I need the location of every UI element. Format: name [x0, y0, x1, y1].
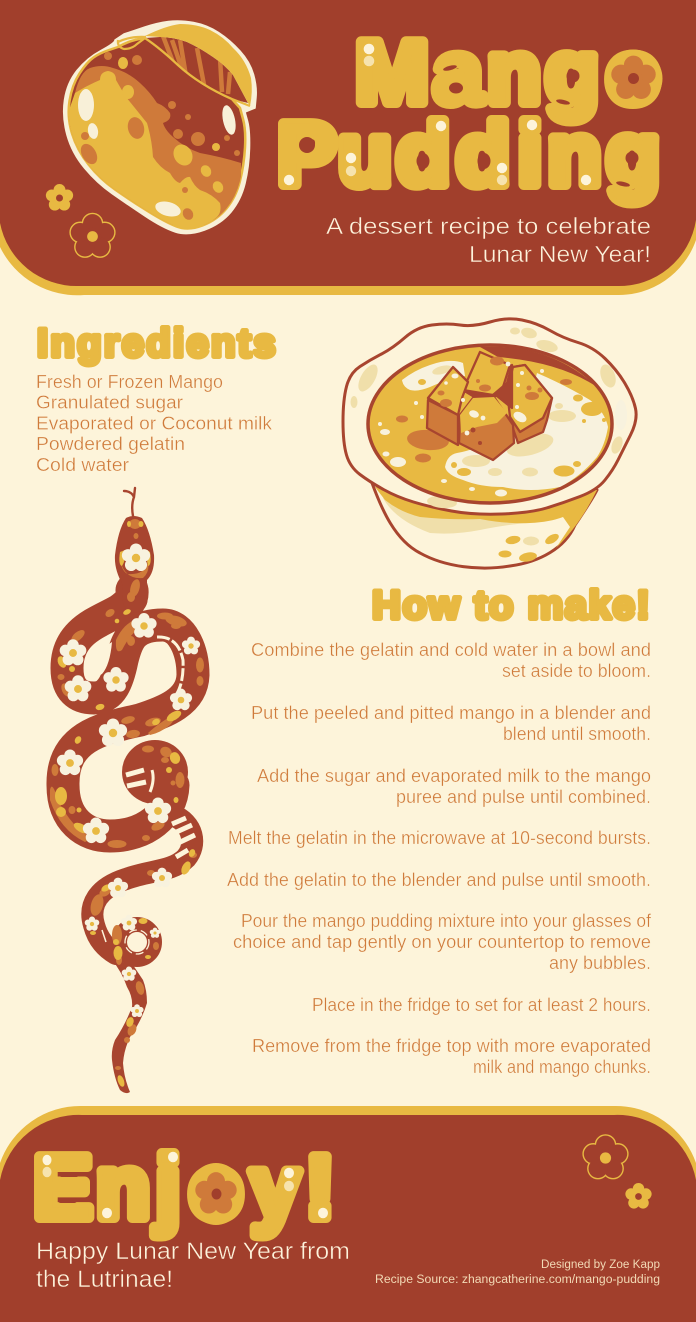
- step 3: Add the sugar and evaporated milk to the mango: [257, 765, 651, 786]
- step 3: [257, 765, 651, 807]
- ventral stripes: [102, 637, 195, 954]
- ingredients list: Fresh or Frozen Mango: [36, 371, 223, 392]
- ingredients list: Granulated sugar: [36, 392, 183, 412]
- footer message: Happy Lunar New Year from: [36, 1238, 350, 1265]
- enjoy decorations: [42, 1152, 328, 1225]
- snake markings: [50, 519, 204, 1070]
- mango cubes: [427, 352, 552, 460]
- credits: Recipe Source: zhangcatherine.com/mango-pudding: [375, 1274, 660, 1286]
- milk pools: [402, 361, 608, 490]
- bowl rim: [343, 319, 636, 514]
- heading: Ingredients: Ingredients: [37, 322, 278, 366]
- snake tongue: [124, 488, 135, 516]
- heading: Enjoy!: Enjoy!: [34, 1138, 335, 1236]
- step 5: Add the gelatin to the blender and pulse until smooth.: [227, 869, 651, 890]
- illustration: snake: [50, 488, 204, 1093]
- snake flowers: [57, 543, 200, 1017]
- step 7: Place in the fridge to set for at least 2 hours.: [312, 994, 651, 1015]
- step 6: Pour the mango pudding mixture into your glasses of: [241, 910, 652, 931]
- subtitle: Lunar New Year!: [469, 241, 651, 267]
- subtitle: A dessert recipe to celebrate: [326, 213, 651, 239]
- icon: bowl of mango pudding: [343, 319, 636, 568]
- step 1: set aside to bloom.: [502, 660, 651, 681]
- title decorations: [284, 120, 638, 188]
- header panel: [0, 0, 696, 295]
- title decorations: [364, 44, 662, 108]
- icon: outline flower: [71, 214, 114, 256]
- icon: small flower: [46, 184, 73, 211]
- heading: How to make!: How to make!: [372, 584, 651, 628]
- step 8: Remove from the fridge top with more evaporated: [252, 1035, 651, 1056]
- ingredients list: Powdered gelatin: [36, 433, 185, 454]
- subtitle: [326, 213, 651, 267]
- icon: outline flower: [584, 1136, 627, 1178]
- step 8: milk and mango chunks.: [473, 1056, 651, 1077]
- credits: [375, 1259, 660, 1286]
- pudding spots: [378, 347, 606, 496]
- step 1: Combine the gelatin and cold water in a bowl and: [251, 639, 651, 660]
- snake body: [63, 586, 193, 960]
- icon: small flower: [625, 1183, 652, 1209]
- step 4: Melt the gelatin in the microwave at 10-second bursts.: [228, 827, 651, 848]
- step 3: puree and pulse until combined.: [396, 786, 651, 807]
- title: Mango: Mango: [355, 22, 660, 122]
- footer message: [36, 1238, 350, 1293]
- snake coil and tail: [112, 740, 188, 1093]
- credits: Designed by Zoe Kapp: [541, 1259, 660, 1271]
- step 2: [251, 702, 651, 744]
- step 1: [251, 639, 651, 681]
- icon: mango: [55, 21, 256, 234]
- footer message: the Lutrinae!: [36, 1266, 173, 1293]
- step 2: Put the peeled and pitted mango in a blender and: [251, 702, 651, 723]
- step 6: [233, 910, 652, 973]
- snake head: [115, 516, 154, 600]
- ingredients list: [36, 371, 273, 475]
- ingredients list: Evaporated or Coconut milk: [36, 412, 273, 434]
- cube speckles: [438, 356, 544, 445]
- step 6: any bubbles.: [549, 952, 651, 973]
- title: Pudding: Pudding: [278, 104, 660, 204]
- step 2: blend until smooth.: [503, 723, 651, 744]
- pudding surface: [368, 345, 612, 503]
- step 8: [252, 1035, 651, 1077]
- how-to steps: [227, 639, 652, 1077]
- ingredients list: Cold water: [36, 454, 129, 475]
- step 6: choice and tap gently on your countertop to remove: [233, 931, 651, 952]
- bowl base: [372, 483, 597, 568]
- mango peel flap: [118, 24, 252, 106]
- teardrop gap: [85, 642, 112, 677]
- footer panel: [0, 1106, 696, 1322]
